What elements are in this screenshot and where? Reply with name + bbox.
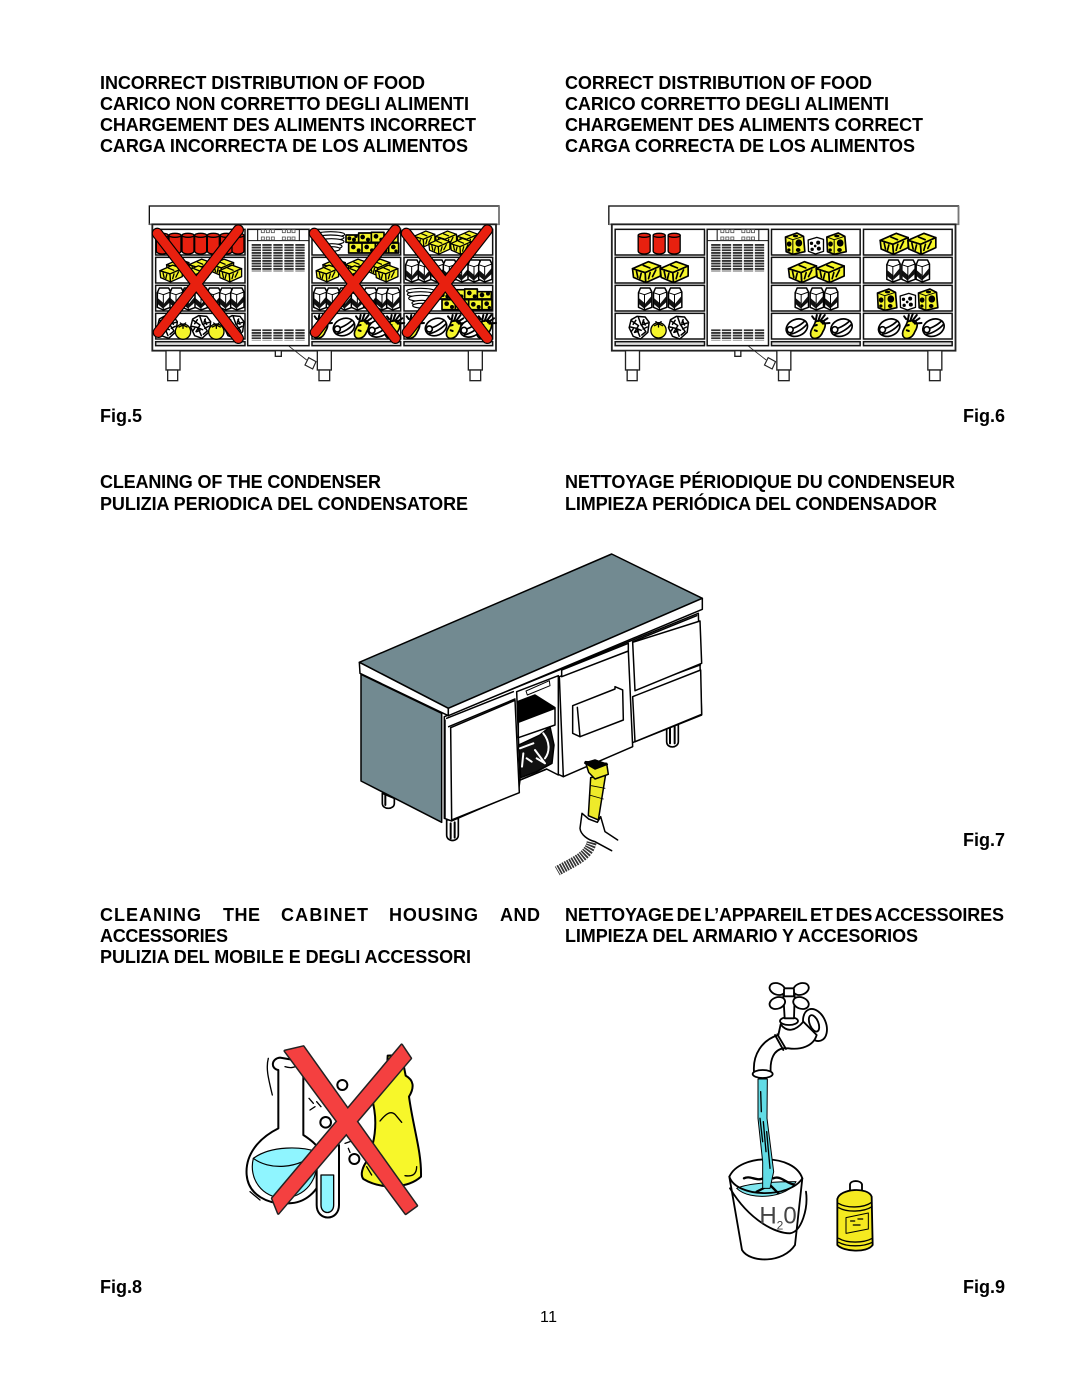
icon: test tube [317, 1145, 339, 1217]
figure 7: condenser cleaning with vacuum [359, 554, 702, 871]
heading: incorrect distribution of food: CARICO NON CORRETTO DEGLI ALIMENTI [100, 94, 469, 114]
heading: correct distribution of food: CHARGEMENT DES ALIMENTS CORRECT [565, 115, 923, 135]
cabinet side panel [361, 674, 442, 822]
drawers [633, 616, 702, 742]
heading: nettoyage de l'appareil [565, 905, 1004, 946]
middle door with filter pocket [559, 643, 633, 777]
icon: red cross over left compartment [157, 230, 238, 338]
bubbles [309, 1080, 359, 1164]
cabinet legs [382, 723, 678, 840]
heading: cleaning of the condenser: CLEANING OF THE CONDENSER [100, 472, 381, 492]
heading: cleaning the cabinet housing and accessories: CABINET [281, 905, 368, 925]
food: left compartment [629, 233, 688, 339]
caption: Fig.5: Fig.5 [100, 406, 142, 426]
heading: cleaning of the condenser [100, 472, 468, 514]
food: overloaded left compartment [156, 233, 244, 339]
heading: cleaning the cabinet housing and accessories: HOUSING [389, 905, 478, 925]
heading: incorrect distribution of food: CHARGEMENT DES ALIMENTS INCORRECT [100, 115, 476, 135]
open compartment with compressor [517, 676, 558, 780]
caption: Fig.8: Fig.8 [100, 1277, 142, 1297]
left door [445, 692, 519, 820]
heading: nettoyage du condenseur [565, 471, 955, 514]
icon: red cross [272, 1045, 417, 1214]
cabinet front [444, 613, 702, 821]
figure 6: cabinet with correct food loading [609, 206, 958, 381]
heading: cleaning the cabinet housing and accessories: THE [223, 905, 260, 925]
heading: nettoyage de l'appareil: NETTOYAGE DE L’APPAREIL ET DES ACCESSOIRES [565, 905, 1004, 925]
heading: incorrect distribution of food: INCORRECT DISTRIBUTION OF FOOD [100, 73, 425, 93]
heading: correct distribution of food: CARGA CORRECTA DE LOS ALIMENTOS [565, 136, 915, 156]
heading: cleaning the cabinet housing and accessories: AND [500, 905, 540, 925]
caption: Fig.6: Fig.6 [963, 406, 1005, 426]
icon: yellow detergent bottle [837, 1181, 873, 1251]
food: overloaded middle compartment [313, 232, 404, 340]
food: overloaded right compartment [405, 231, 496, 340]
figure 5: cabinet with incorrect food loading [149, 206, 499, 381]
heading: cleaning the cabinet housing and accessories: ACCESSORIES [100, 926, 228, 946]
page number: 11 [540, 1309, 557, 1326]
icon: flask with blue liquid [247, 1058, 323, 1204]
heading: correct distribution of food: CARICO CORRETTO DEGLI ALIMENTI [565, 94, 889, 114]
icon: tap [753, 981, 831, 1078]
figure 8: crossed-out chemical products [247, 1045, 421, 1217]
heading: incorrect distribution of food: CARGA INCORRECTA DE LOS ALIMENTOS [100, 136, 468, 156]
label: H2O: 0 [783, 1202, 797, 1229]
caption: Fig.9: Fig.9 [963, 1277, 1005, 1297]
heading: cleaning the cabinet housing and accessories: CLEANING [100, 905, 201, 925]
icon: yellow detergent bottle [362, 1055, 421, 1186]
heading: correct distribution of food [565, 73, 923, 156]
heading: nettoyage du condenseur: LIMPIEZA PERIÓDICA DEL CONDENSADOR [565, 493, 937, 514]
icon: red cross over middle compartment [314, 230, 395, 338]
heading: nettoyage de l'appareil: LIMPIEZA DEL ARMARIO Y ACCESORIOS [565, 926, 918, 946]
food: middle compartment [784, 233, 855, 340]
heading: cleaning the cabinet housing and accessories: PULIZIA DEL MOBILE E DEGLI ACCESSORI [100, 947, 471, 967]
icon: bucket with water [729, 1159, 806, 1259]
caption: Fig.7: Fig.7 [963, 830, 1005, 850]
water stream [758, 1079, 774, 1188]
label: H2O: H [759, 1202, 777, 1229]
food: right compartment [876, 233, 947, 340]
heading: cleaning the cabinet housing and accessories [100, 905, 540, 967]
worktop [359, 554, 702, 716]
vacuum cleaner with hand [557, 760, 618, 871]
heading: correct distribution of food: CORRECT DISTRIBUTION OF FOOD [565, 73, 872, 93]
heading: incorrect distribution of food [100, 73, 476, 156]
heading: cleaning of the condenser: PULIZIA PERIODICA DEL CONDENSATORE [100, 494, 468, 514]
label: H2O: 2 [777, 1218, 784, 1232]
figure 9: tap, bucket and detergent [729, 981, 873, 1259]
heading: nettoyage du condenseur: NETTOYAGE PÉRIODIQUE DU CONDENSEUR [565, 471, 955, 492]
icon: red cross over right compartment [406, 230, 487, 338]
